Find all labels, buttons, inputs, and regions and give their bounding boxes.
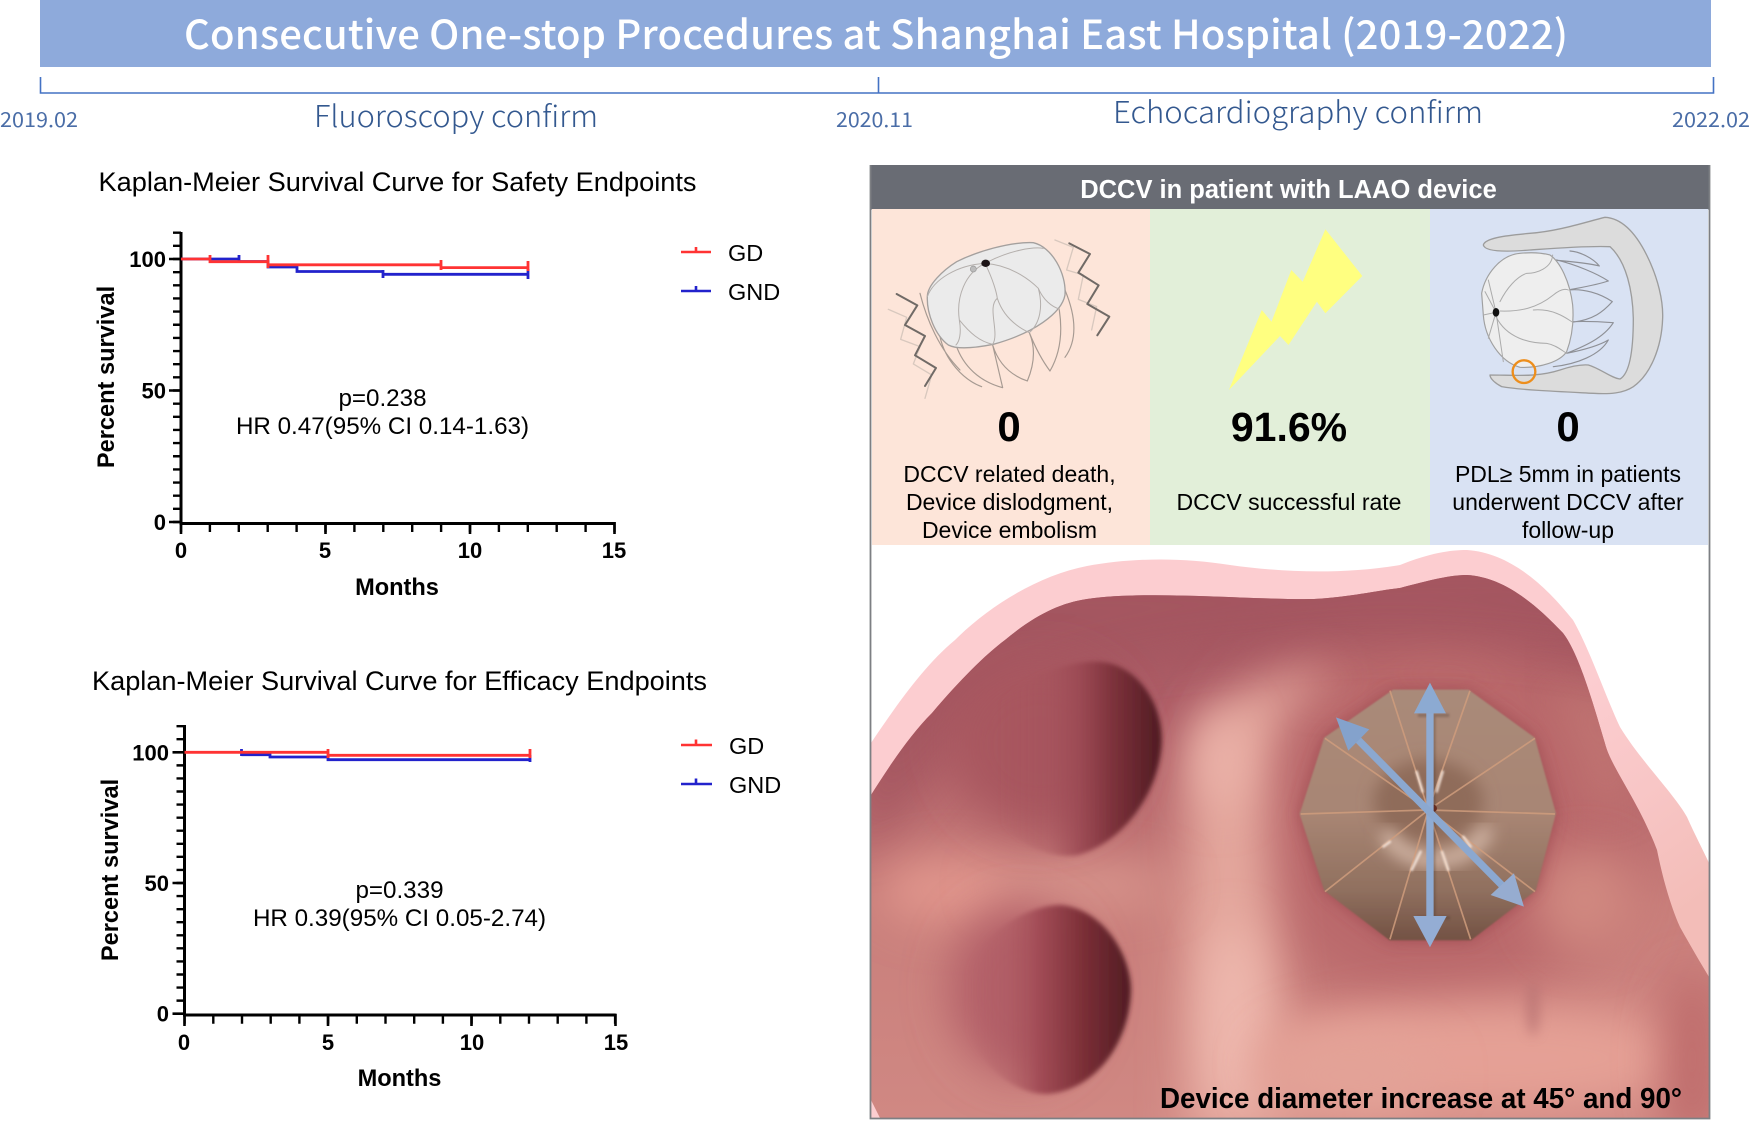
y axis title: Percent survival: [94, 286, 120, 468]
stat: 0: 0: [1556, 403, 1580, 450]
x tick labels: 15: [602, 538, 626, 563]
x tick labels: 5: [322, 1030, 334, 1055]
date: 2022.02: 2022.02: [1672, 104, 1750, 133]
stat description: [903, 461, 1116, 543]
stat description: underwent DCCV after: [1452, 489, 1684, 515]
icon: device in appendage with leak marker: [1482, 217, 1663, 394]
axes: [169, 232, 616, 534]
legend: GND: GND: [729, 772, 781, 798]
x tick labels: 0: [175, 538, 187, 563]
x tick labels: 0: [178, 1030, 190, 1055]
icon: lightning bolt: [1229, 229, 1362, 390]
curve: GND: [181, 255, 528, 279]
LAAO device seen from atrium: [1301, 683, 1555, 947]
tissue between veins: [878, 856, 1022, 924]
panel heading bar: DCCV in patient with LAAO device: [1080, 176, 1497, 204]
chart heading: Kaplan-Meier Survival Curve for Safety Endpoints: [98, 167, 696, 197]
statistics: [236, 385, 529, 440]
legend: GD: [681, 733, 764, 759]
curve: GND: [242, 749, 530, 762]
legend: GD: [681, 240, 763, 266]
x axis title: Months: [355, 575, 439, 601]
arrow: 45 degree diameter: [1336, 717, 1524, 907]
curve: GD: [184, 749, 530, 758]
x tick labels: 15: [604, 1030, 628, 1055]
statistics: [253, 877, 546, 932]
chart heading: Kaplan-Meier Survival Curve for Efficacy Endpoints: [92, 666, 707, 696]
vein surround shading: [958, 717, 1062, 844]
stat card: success rate: [1150, 209, 1430, 545]
y tick labels: 0: [157, 1002, 169, 1026]
legend: GD: GD: [728, 240, 763, 266]
y tick labels: 50: [145, 871, 169, 896]
stat description: DCCV related death,: [903, 461, 1116, 487]
x tick labels: [175, 538, 626, 563]
ridge: [1185, 668, 1330, 1122]
y tick labels: [132, 740, 169, 1026]
stat: 0: 0: [997, 403, 1021, 450]
phase: Fluoroscopy confirm: Fluoroscopy confirm: [314, 92, 598, 136]
stat description: Device dislodgment,: [906, 489, 1113, 515]
chart: efficacy endpoints: [92, 666, 781, 1092]
statistics: HR 0.47(95% CI 0.14-1.63): [236, 413, 529, 440]
date: 2020.11: 2020.11: [836, 104, 913, 133]
chart: safety endpoints: [94, 167, 780, 601]
x tick labels: 5: [319, 538, 331, 563]
legend: GND: GND: [728, 279, 780, 305]
legend: GD: GD: [729, 733, 764, 759]
y tick labels: 100: [129, 247, 166, 272]
date: 2019.02: 2019.02: [0, 104, 78, 133]
stat description: follow-up: [1522, 517, 1614, 543]
stat card: peri-device leak: [1430, 209, 1708, 545]
stat description: PDL≥ 5mm in patients: [1455, 461, 1681, 487]
stat: 91.6%: 91.6%: [1231, 404, 1347, 450]
legend: GND: [681, 279, 780, 305]
atrium tissue: [860, 550, 1722, 1122]
caption: Device diameter increase at 45° and 90°: [1160, 1083, 1682, 1115]
title banner: [40, 0, 1711, 67]
timeline: [0, 77, 1750, 136]
upper pulmonary vein: [1033, 660, 1165, 858]
x tick labels: 10: [458, 538, 482, 563]
statistics: p=0.238: [338, 385, 427, 412]
y tick labels: 50: [142, 378, 166, 404]
stat card: safety: [872, 209, 1150, 545]
axes: [172, 725, 617, 1026]
y axis title: Percent survival: [98, 779, 124, 961]
y tick labels: [129, 247, 166, 535]
lower pulmonary vein: [997, 902, 1134, 1096]
panel: DCCV in patient with LAAO device: [860, 165, 1722, 1122]
y tick labels: 100: [132, 740, 169, 766]
x tick labels: 10: [460, 1030, 484, 1055]
icon: tilted LAAO device: [888, 240, 1109, 398]
title text: Consecutive One-stop Procedures at Shanghai East Hospital (2019-2022): [184, 3, 1568, 61]
panel frame: [870, 165, 1710, 1118]
timeline bracket: [40, 77, 1714, 93]
phase: Echocardiography confirm: Echocardiography confirm: [1113, 88, 1483, 132]
x axis title: Months: [358, 1066, 441, 1092]
stat description: DCCV successful rate: [1177, 489, 1401, 515]
curve: GD: [181, 255, 528, 271]
statistics: HR 0.39(95% CI 0.05-2.74): [253, 905, 546, 932]
illustration: left atrium with LAAO device: [860, 550, 1722, 1122]
x tick labels: [178, 1030, 628, 1055]
legend: GND: [681, 772, 781, 798]
y tick labels: 0: [154, 510, 166, 535]
stat description: Device embolism: [922, 517, 1097, 543]
stat description: [1452, 461, 1684, 543]
statistics: p=0.339: [355, 877, 444, 904]
arrow: 90 degree diameter: [1413, 683, 1450, 947]
panel heading bar: [870, 165, 1710, 210]
